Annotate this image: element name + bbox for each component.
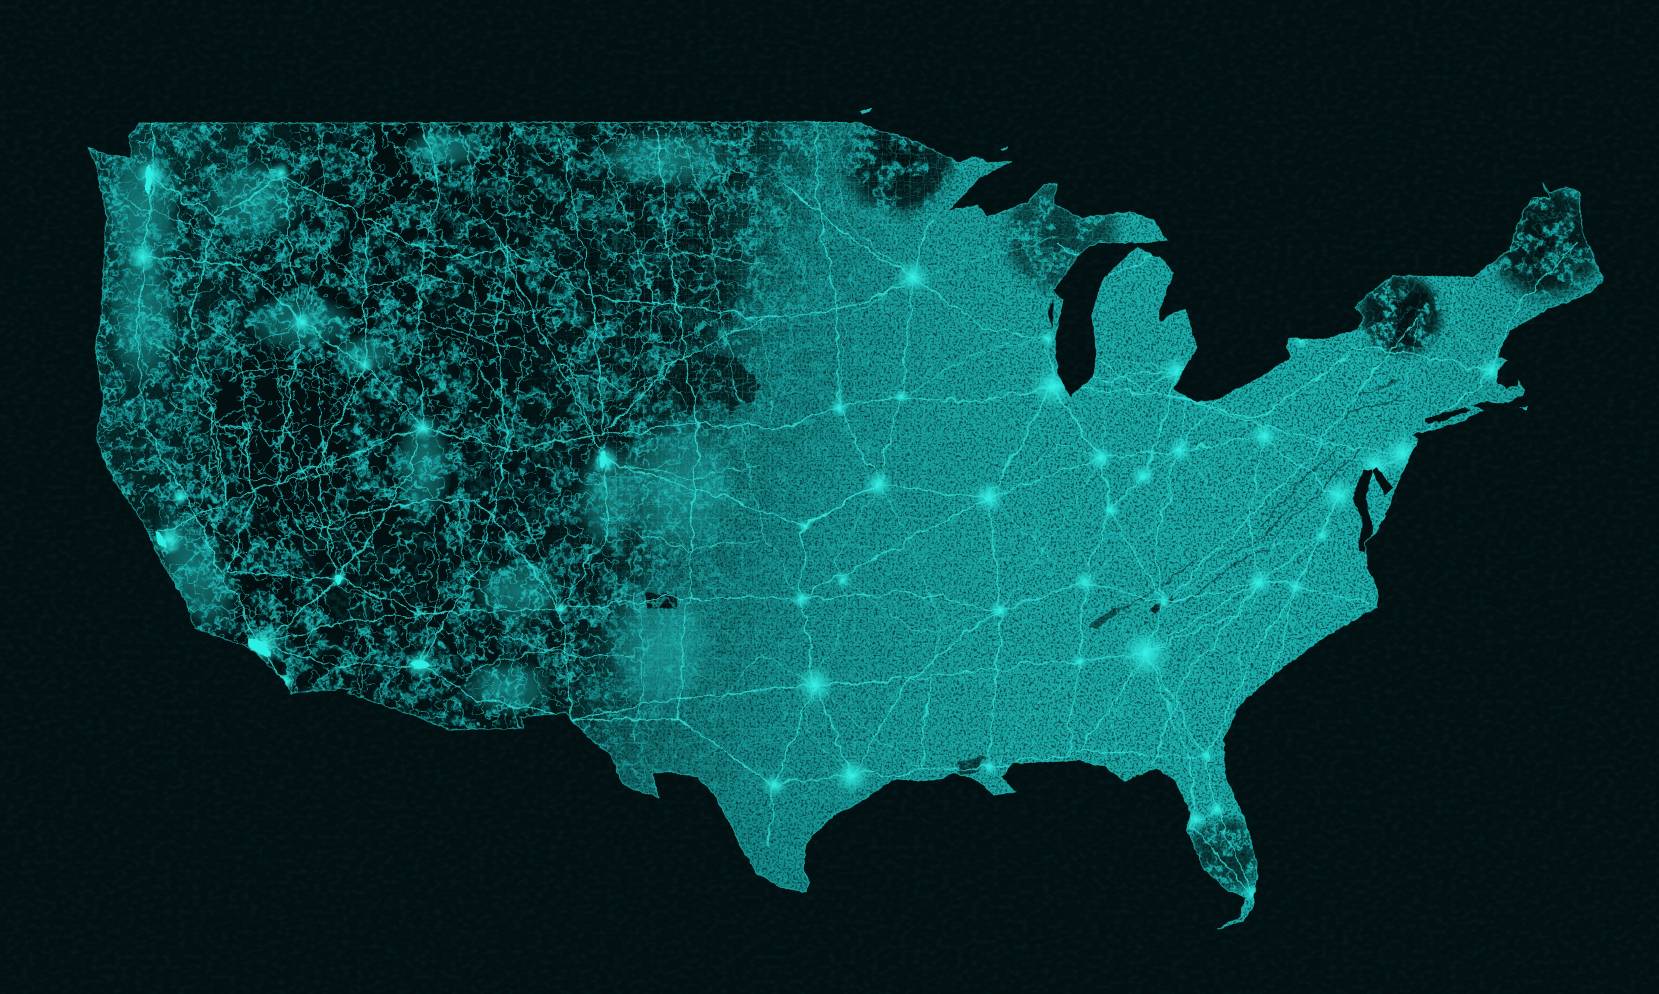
secondary eastern roads xyxy=(719,127,1492,825)
sparse western road gaps xyxy=(88,121,1600,894)
secondary western roads xyxy=(127,127,762,741)
empty regions with few roads xyxy=(103,127,1420,774)
city glows xyxy=(128,159,1508,905)
coastline highlight xyxy=(89,122,1603,929)
highway network xyxy=(138,122,1576,899)
plains and midwest road grid xyxy=(500,110,1300,810)
denser road haze in the settled west xyxy=(103,127,741,719)
dense city cores xyxy=(145,165,606,669)
outlying islands xyxy=(860,108,1528,410)
Chesapeake, Delaware Bay and Long Island Sound xyxy=(1048,300,1470,552)
dark ridges and lakes in the east xyxy=(645,593,1174,774)
